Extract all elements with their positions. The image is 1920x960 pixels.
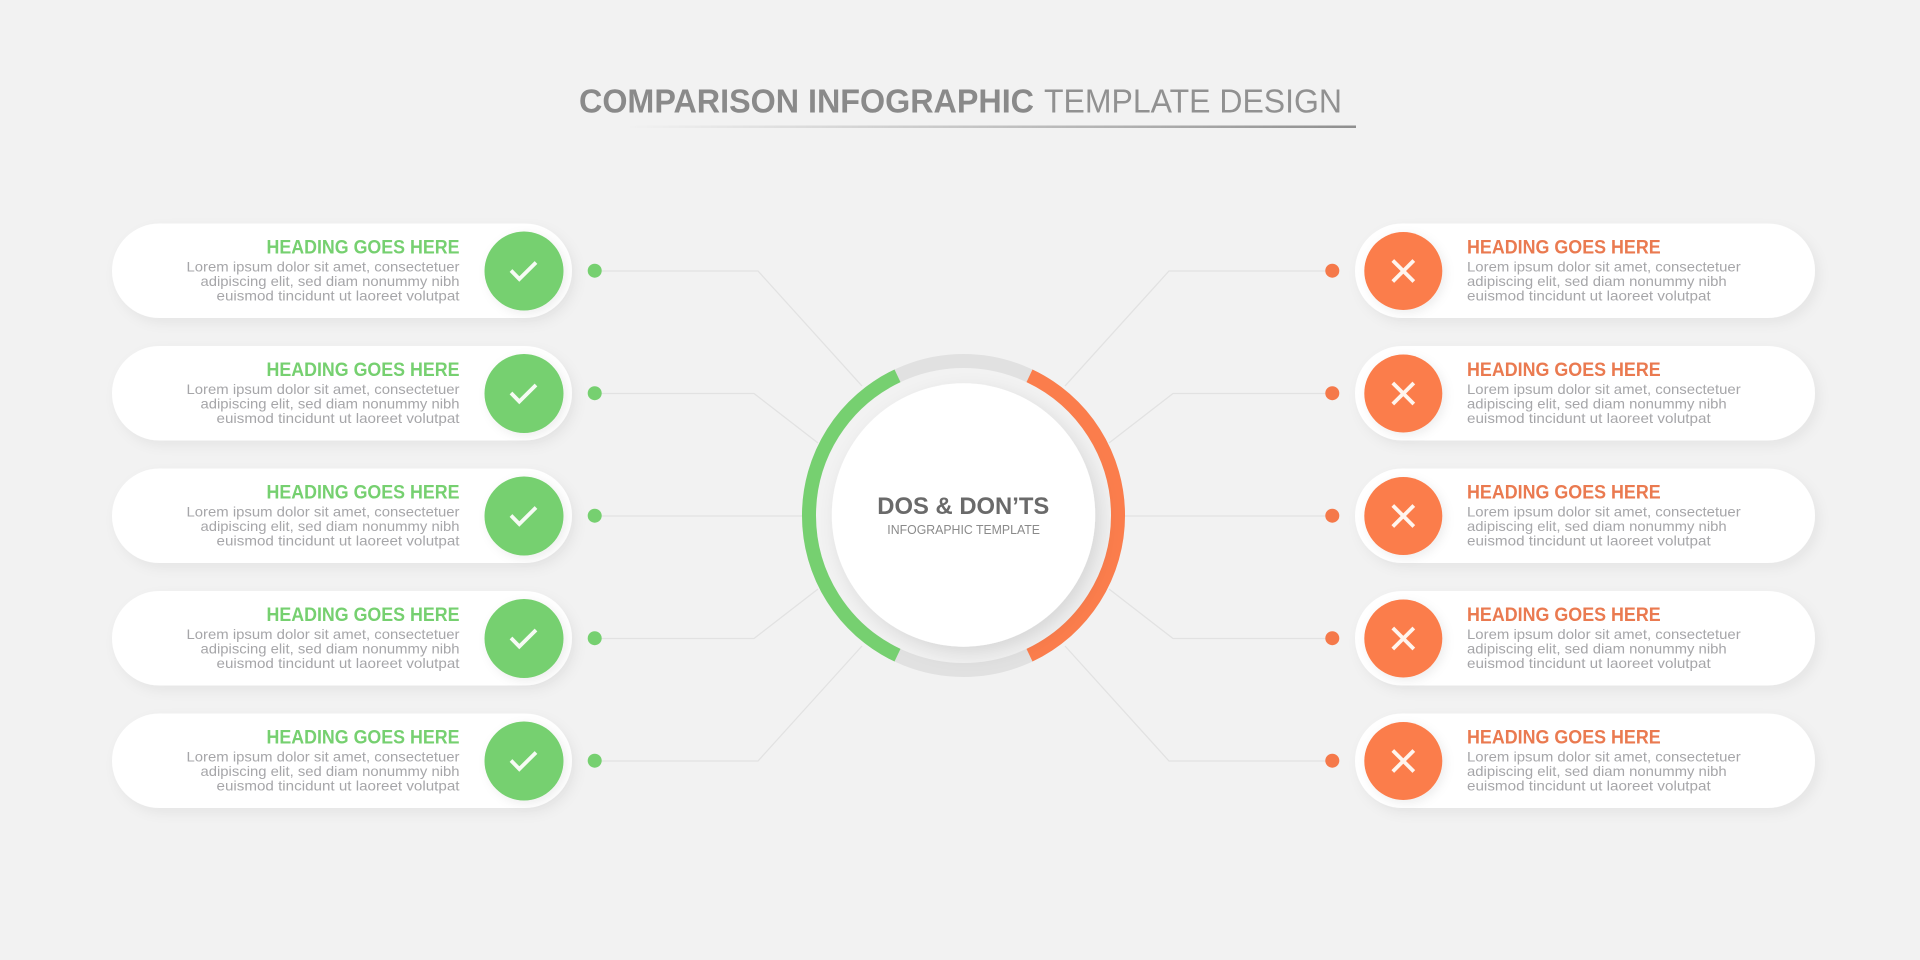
panel: don't 1 — [1325, 224, 1815, 318]
body text: Lorem ipsum dolor sit amet, consectetuer — [186, 750, 460, 765]
body text: Lorem ipsum dolor sit amet, consectetuer — [1467, 505, 1741, 520]
panel: don't 5 — [1325, 714, 1815, 808]
body text — [1467, 505, 1741, 548]
body text: Lorem ipsum dolor sit amet, consectetuer — [1467, 627, 1741, 642]
panel: do 4 — [112, 591, 602, 686]
body text — [186, 627, 460, 671]
dot — [588, 754, 602, 768]
icon: cross — [1364, 600, 1442, 678]
panel: don't 4 — [1325, 591, 1815, 686]
heading: HEADING GOES HERE — [1467, 359, 1661, 381]
title: COMPARISON INFOGRAPHIC — [579, 82, 1034, 120]
dot — [588, 631, 602, 645]
icon: check — [484, 476, 564, 556]
body text: adipiscing elit, sed diam nonummy nibh — [1467, 764, 1727, 779]
body text: Lorem ipsum dolor sit amet, consectetuer — [186, 505, 460, 520]
icon: cross — [1364, 354, 1442, 432]
body text: euismod tincidunt ut laoreet volutpat — [216, 656, 460, 671]
panel: do 5 — [112, 714, 602, 808]
panel: don't 3 — [1325, 468, 1815, 563]
green arc — [809, 376, 898, 655]
body text — [1467, 750, 1741, 794]
heading: HEADING GOES HERE — [266, 482, 460, 504]
body text: euismod tincidunt ut laoreet volutpat — [216, 534, 460, 548]
dot — [1325, 631, 1339, 645]
icon: check — [484, 722, 564, 800]
body text — [1467, 627, 1741, 671]
heading: HEADING GOES HERE — [1467, 236, 1661, 258]
heading: HEADING GOES HERE — [266, 604, 460, 626]
body text: adipiscing elit, sed diam nonummy nibh — [200, 764, 460, 779]
body text: adipiscing elit, sed diam nonummy nibh — [200, 519, 460, 534]
body text: euismod tincidunt ut laoreet volutpat — [216, 411, 460, 426]
body text — [186, 750, 460, 794]
body text: euismod tincidunt ut laoreet volutpat — [1467, 288, 1711, 304]
body text: adipiscing elit, sed diam nonummy nibh — [200, 642, 460, 657]
central hub — [809, 361, 1118, 670]
panel: do 1 — [112, 224, 602, 318]
body text: euismod tincidunt ut laoreet volutpat — [216, 288, 460, 304]
connector lines — [601, 271, 1326, 761]
dot — [588, 386, 602, 400]
icon: cross — [1364, 477, 1442, 555]
body text: euismod tincidunt ut laoreet volutpat — [1467, 656, 1711, 671]
body text: adipiscing elit, sed diam nonummy nibh — [200, 397, 460, 412]
icon: check — [484, 354, 564, 433]
icon: check — [484, 232, 564, 310]
inner disc — [832, 383, 1095, 647]
body text — [186, 505, 460, 548]
body text: adipiscing elit, sed diam nonummy nibh — [200, 274, 460, 289]
body text: euismod tincidunt ut laoreet volutpat — [216, 778, 460, 794]
body text: euismod tincidunt ut laoreet volutpat — [1467, 411, 1711, 426]
body text: euismod tincidunt ut laoreet volutpat — [1467, 778, 1711, 794]
dot — [588, 264, 602, 278]
title: TEMPLATE DESIGN — [1044, 82, 1342, 120]
body text: Lorem ipsum dolor sit amet, consectetuer — [186, 627, 460, 642]
body text: adipiscing elit, sed diam nonummy nibh — [1467, 519, 1727, 534]
icon: cross — [1364, 722, 1442, 800]
dot — [1325, 386, 1339, 400]
heading: HEADING GOES HERE — [1467, 482, 1661, 504]
title underline — [625, 126, 1356, 128]
body text: Lorem ipsum dolor sit amet, consectetuer — [186, 260, 460, 275]
ring track — [809, 361, 1118, 670]
body text — [1467, 260, 1741, 304]
heading: HEADING GOES HERE — [1467, 726, 1661, 748]
hub subheading: INFOGRAPHIC TEMPLATE — [887, 522, 1040, 537]
body text: adipiscing elit, sed diam nonummy nibh — [1467, 642, 1727, 657]
hub heading: DOS & DON’TS — [877, 493, 1049, 520]
panel: don't 2 — [1325, 346, 1815, 440]
icon: cross — [1364, 232, 1442, 310]
dot — [1325, 754, 1339, 768]
heading: HEADING GOES HERE — [266, 236, 460, 258]
body text — [186, 260, 460, 304]
dot — [588, 509, 602, 523]
panel: do 2 — [112, 346, 602, 440]
body text: adipiscing elit, sed diam nonummy nibh — [1467, 274, 1727, 289]
title — [579, 82, 1342, 120]
body text — [186, 382, 460, 426]
heading: HEADING GOES HERE — [266, 359, 460, 381]
body text: Lorem ipsum dolor sit amet, consectetuer — [1467, 260, 1741, 275]
body text: adipiscing elit, sed diam nonummy nibh — [1467, 397, 1727, 412]
icon: check — [484, 599, 564, 678]
heading: HEADING GOES HERE — [266, 726, 460, 748]
body text — [1467, 382, 1741, 426]
body text: Lorem ipsum dolor sit amet, consectetuer — [1467, 382, 1741, 397]
body text: Lorem ipsum dolor sit amet, consectetuer — [1467, 750, 1741, 765]
panel: do 3 — [112, 468, 602, 563]
body text: Lorem ipsum dolor sit amet, consectetuer — [186, 382, 460, 397]
heading: HEADING GOES HERE — [1467, 604, 1661, 626]
body text: euismod tincidunt ut laoreet volutpat — [1467, 534, 1711, 548]
dot — [1325, 264, 1339, 278]
orange arc — [1030, 376, 1118, 655]
dot — [1325, 509, 1339, 523]
